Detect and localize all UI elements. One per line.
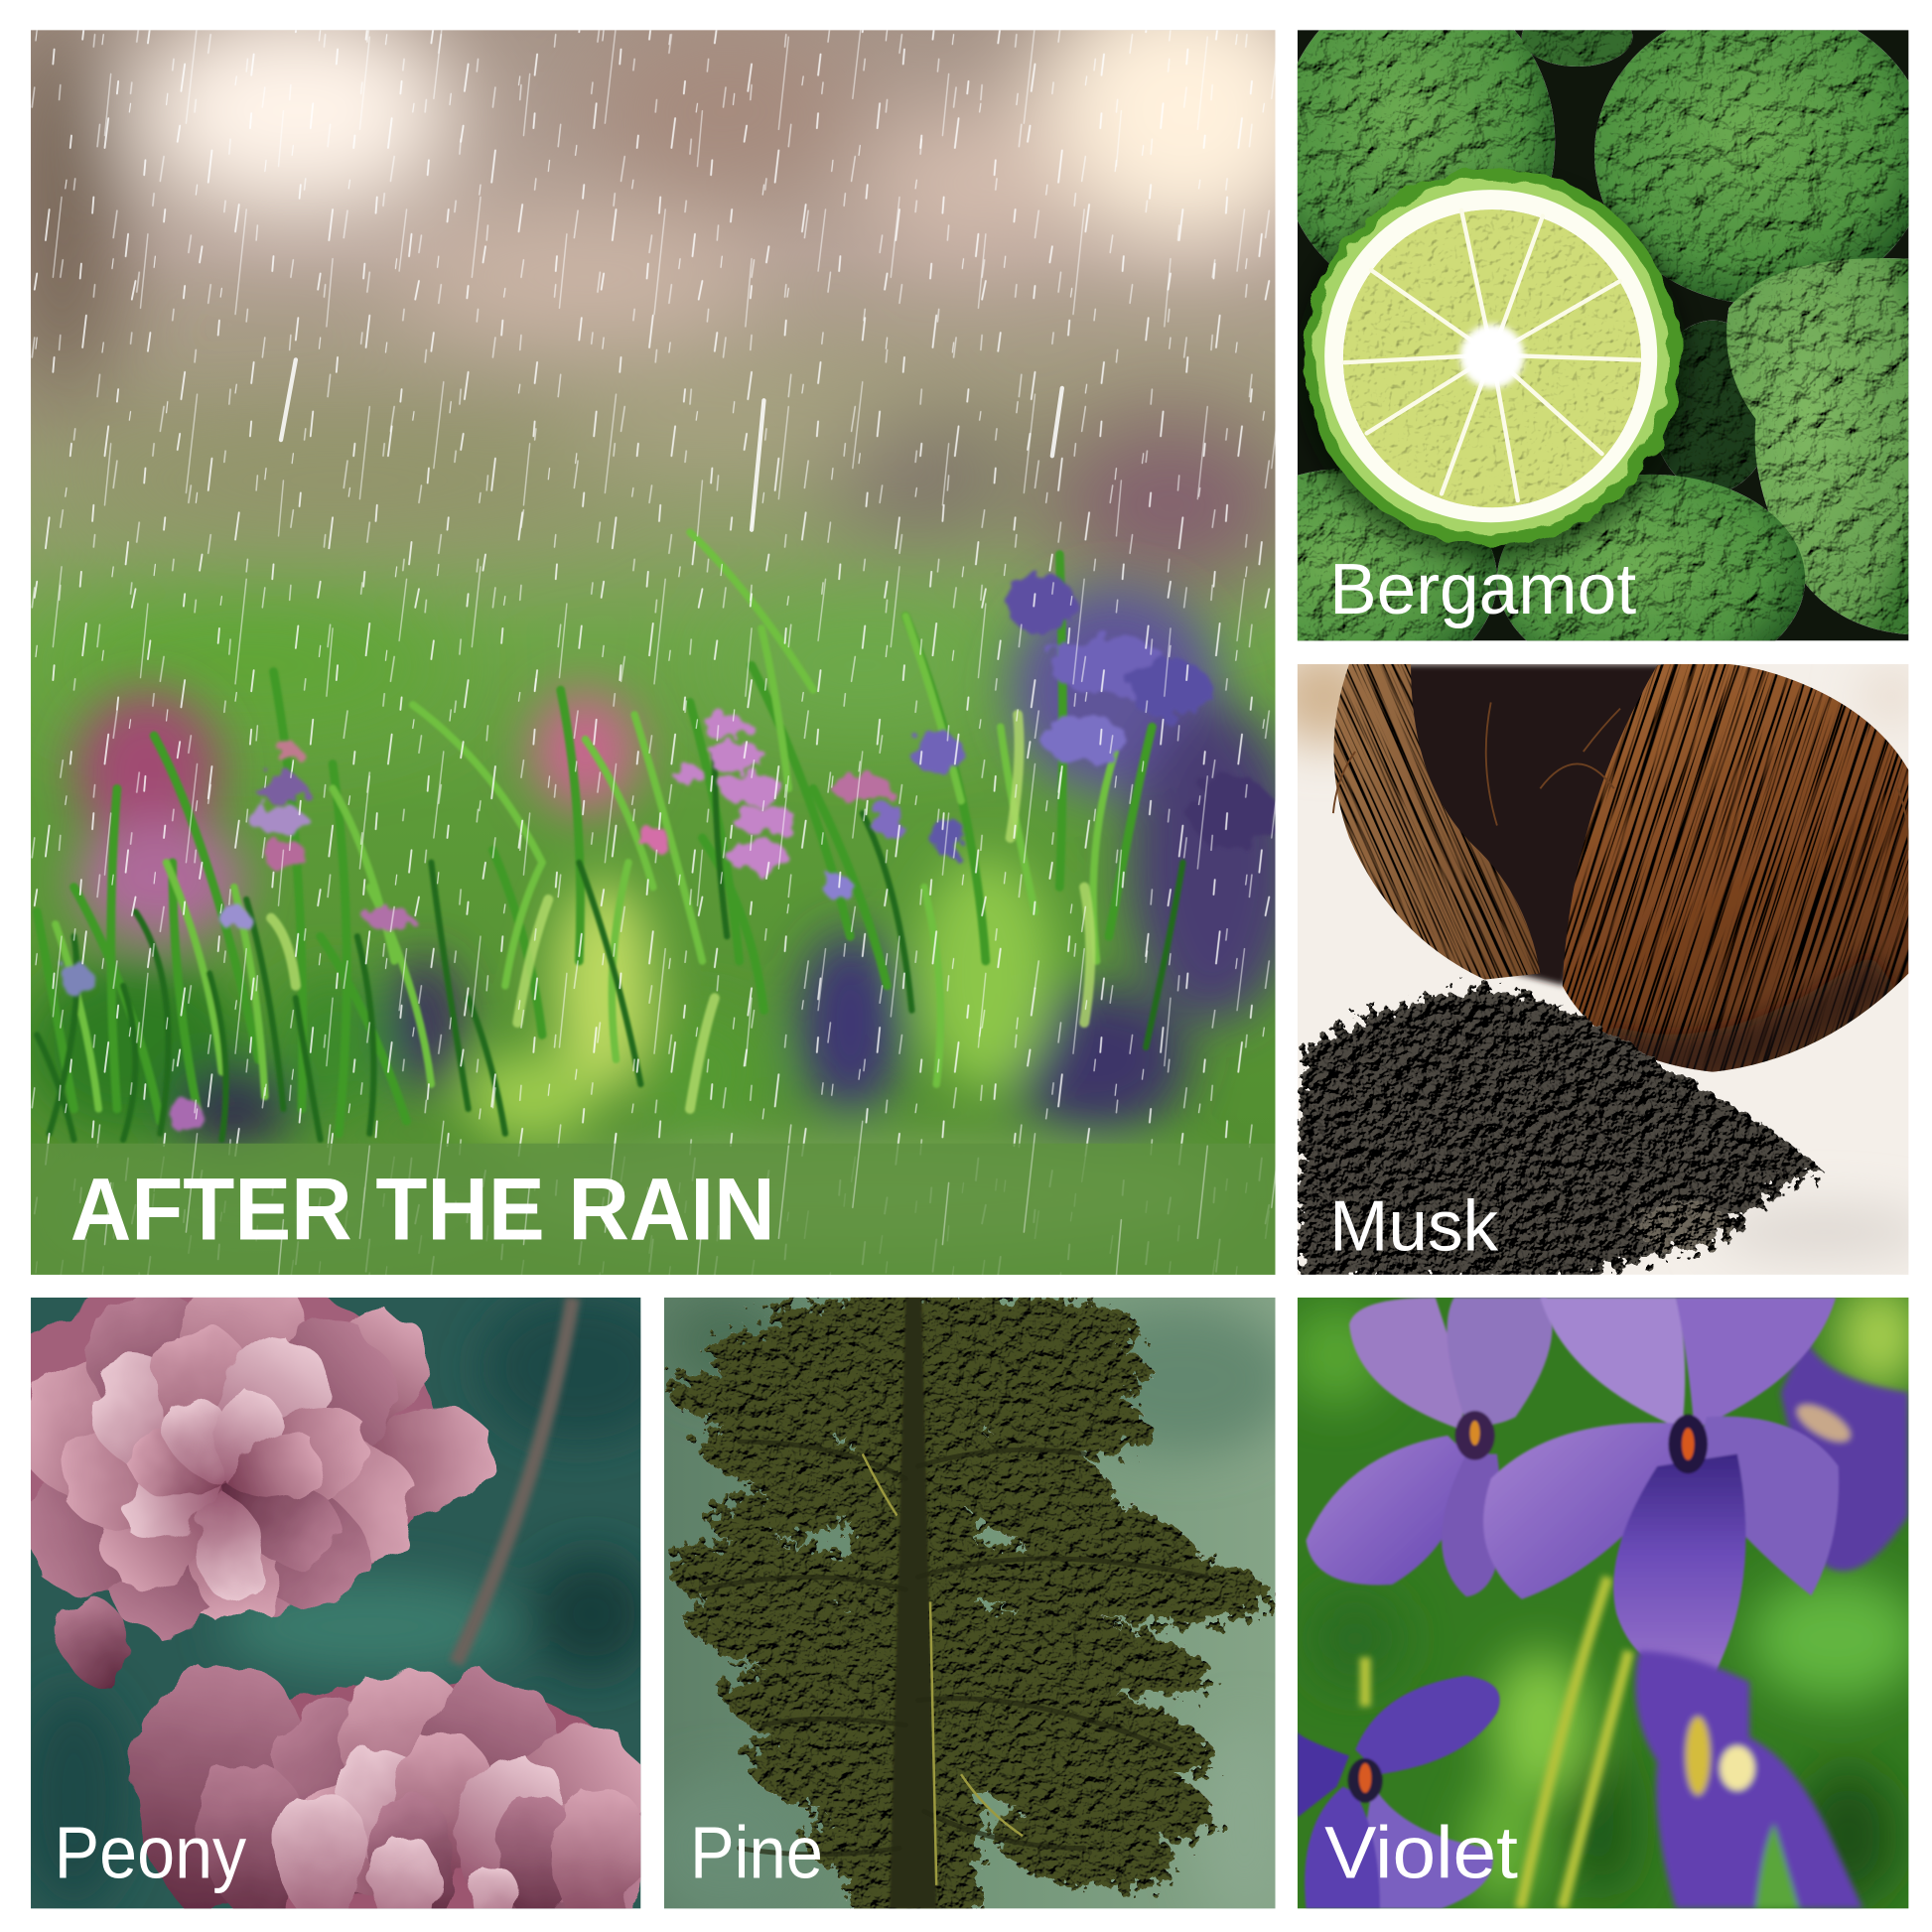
panel: bergamot <box>1297 30 1908 641</box>
left tuft of hair <box>1159 525 1721 1119</box>
flowers in the meadow <box>62 574 1274 1133</box>
blurred meadow background <box>31 30 1275 715</box>
label: Musk <box>1329 1187 1499 1267</box>
right tuft of hair <box>1399 505 1932 1243</box>
stems <box>456 1298 573 1663</box>
label: Bergamot <box>1329 550 1636 629</box>
title: AFTER THE RAIN <box>70 1160 775 1259</box>
stray hairs <box>1333 702 1908 850</box>
label: Violet <box>1324 1811 1518 1893</box>
soil pile <box>1297 986 1824 1282</box>
upper left violet <box>1307 1298 1553 1596</box>
lower peony <box>113 1654 674 1932</box>
panel: after the rain <box>6 0 1330 1276</box>
cut bergamot <box>1295 169 1690 559</box>
flower stems <box>1365 1578 1629 1908</box>
panel: violet <box>1288 1282 1923 1910</box>
panel: pine <box>640 1294 1294 1922</box>
rain streaks <box>31 30 1276 1276</box>
label: Pine <box>690 1811 823 1893</box>
rear right violet <box>1780 1337 1908 1571</box>
main violet <box>1483 1298 1839 1674</box>
upper peony <box>0 1266 500 1709</box>
dark pod interior <box>1392 664 1676 986</box>
panel: musk <box>1159 505 1932 1282</box>
label: Peony <box>55 1811 247 1893</box>
title banner <box>31 1144 1276 1276</box>
whole bergamot fruits <box>1297 30 1908 641</box>
lower left violet <box>1298 1676 1500 1908</box>
pine tree <box>669 1298 1272 1913</box>
grass blades <box>37 532 1182 1140</box>
lower right violet <box>1635 1651 1863 1908</box>
panel: peony <box>0 1266 678 1932</box>
